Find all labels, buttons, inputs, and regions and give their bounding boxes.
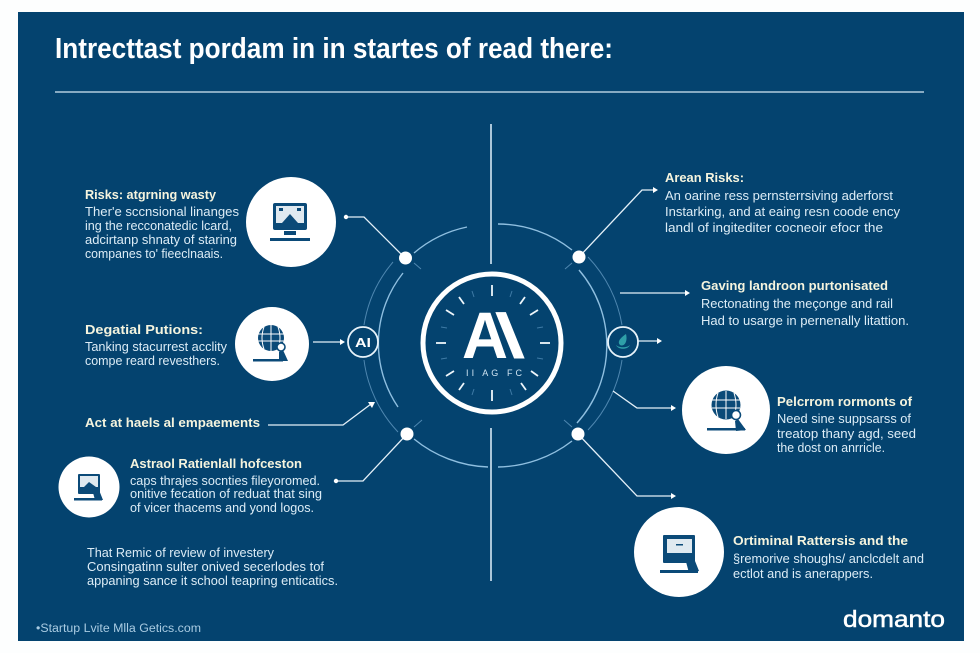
brand logo: domanto [843,606,945,632]
icon: monitor in circle [246,177,336,267]
text block: risks: ing the recconatedic lcard, [85,219,232,233]
text block: risks: Risks: atgrning wasty [85,187,217,202]
central AI emblem: II AG FC [466,368,522,378]
text block: astral: of vicer thacems and yond logos. [130,501,314,515]
central vertical lines [490,124,492,581]
text block: review paragraph: That Remic of review of investery [87,546,275,560]
text block: arean risks: landl of ingitediter cocneoir efocr the [665,221,883,235]
text block: arean risks: An oarine ress pernsterrsiving aderforst [665,189,894,203]
text block: ortiminal: ectlot and is anerappers. [733,567,873,581]
text block: gaving: Gaving landroon purtonisated [701,278,888,293]
text block: act at: Act at haels al empaements [85,415,260,430]
icon: monitor and hand in right circle [634,507,724,597]
text block: arean risks [665,170,901,235]
text block: arean risks: Arean Risks: [665,170,744,185]
text block: ortiminal: §remorive shoughs/ anclcdelt and [733,552,924,566]
icon: monitor and hand in circle [58,456,120,518]
text block: gaving: Rectonating the meçonge and rail [701,297,893,311]
text block: astral: Astraol Ratienlall hofceston [130,456,302,471]
central AI emblem: A [462,298,508,372]
text block: astral: onitive fecation of reduat that sing [130,487,322,501]
text block: risks: Ther'e sccnsional linanges [85,205,239,219]
orbit arcs [364,224,622,467]
text block: digital: Degatial Putions: [85,322,203,337]
text block: ortiminal: Ortiminal Rattersis and the [733,533,908,548]
text block: review paragraph: appaning sance it school teapring enticatics. [87,574,338,588]
small AI badge [348,327,378,357]
small leaf badge [608,327,638,357]
text block: digital: compe reard revesthers. [85,354,220,368]
text block: gaving: Had to usarge in pernenally litattion. [701,314,909,328]
text block: risks: adcirtanp shnaty of staring [85,233,237,247]
text block: gaving [701,278,909,328]
central AI emblem: I [486,298,534,372]
central AI emblem [423,274,561,412]
text block: digital [85,322,228,368]
text block: digital: Tanking stacurrest acclity [85,340,228,354]
text block: arean risks: Instarking, and at eaing resn coode ency [665,205,901,219]
small AI badge: AI [355,335,371,350]
text block: astral: caps thrajes socnties fileyoromed. [130,474,320,488]
text block: pelcrrom: Need sine suppsarss of [777,412,912,426]
text block: review paragraph [87,546,338,588]
text block: pelcrrom: Pelcrrom rormonts of [777,394,913,409]
text block: review paragraph: Consingatinn sulter onived secerlodes tof [87,560,325,574]
icon: globe in circle [235,307,309,381]
title: Intrecttast pordam in in startes of read there: [55,33,613,65]
footer source: •Startup Lvite Mlla Getics.com [36,623,201,635]
text block: ortiminal [733,533,924,581]
connector arrows [268,187,690,499]
text block: risks [85,187,239,261]
text block: pelcrrom: treatop thany agd, seed [777,427,916,441]
icon: globe in right circle [682,366,770,454]
text block: astral [130,456,322,515]
text block: pelcrrom: the dost on anrricle. [777,441,885,455]
text block: risks: companes to' fieeclnaais. [85,247,223,261]
text block: pelcrrom [777,394,916,455]
nodes [399,250,586,440]
